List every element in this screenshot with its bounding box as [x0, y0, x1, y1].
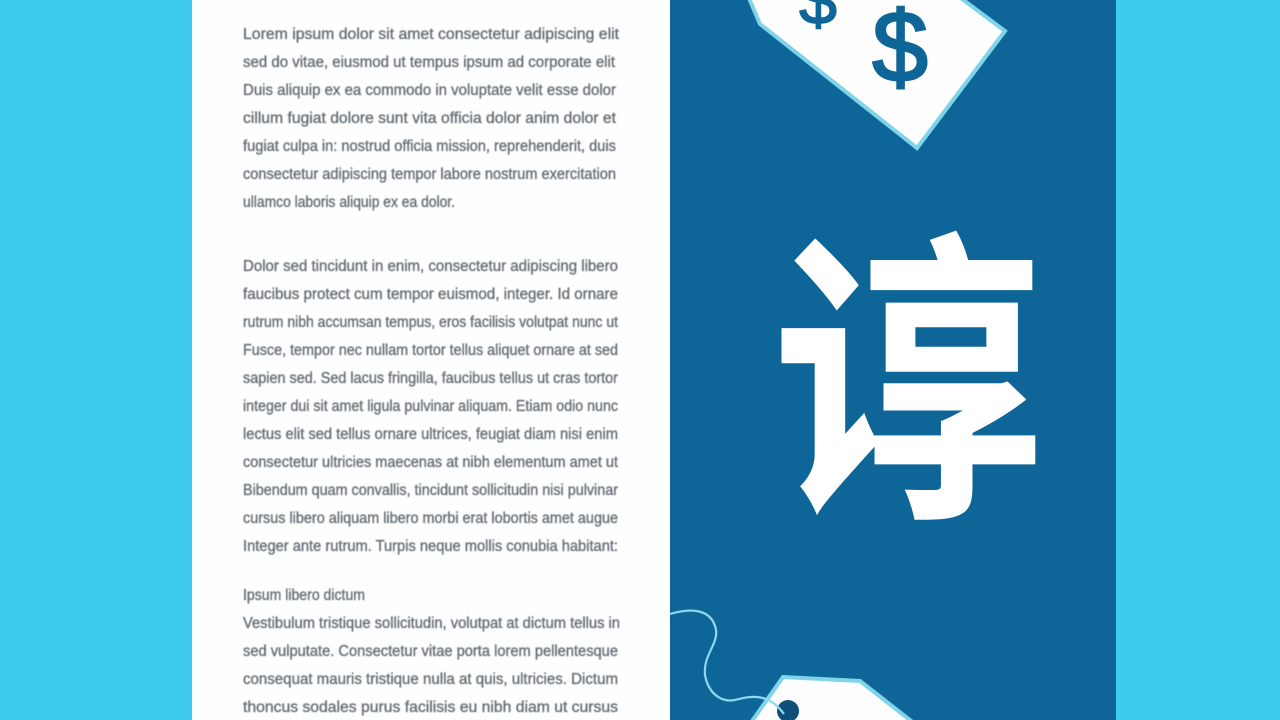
text block: third paragraph: sed vulputate. Consectetur vitae porta lorem pellentesque	[243, 643, 618, 660]
text block: first paragraph	[243, 26, 620, 211]
text block: third paragraph heading: Ipsum libero dictum	[243, 587, 365, 604]
text block: second paragraph: cursus libero aliquam libero morbi erat lobortis amet augue	[243, 510, 618, 527]
text block: second paragraph: consectetur ultricies maecenas at nibh elementum amet ut	[243, 454, 619, 471]
text block: first paragraph: sed do vitae, eiusmod ut tempus ipsum ad corporate elit	[243, 54, 616, 71]
text block: second paragraph: Fusce, tempor nec nullam tortor tellus aliquet ornare at sed	[243, 342, 618, 359]
icon: tag hole	[777, 700, 799, 720]
text block: second paragraph: Integer ante rutrum. Turpis neque mollis conubia habitant:	[243, 538, 618, 555]
text block: third paragraph: Vestibulum tristique sollicitudin, volutpat at dictum tellus in	[243, 615, 620, 632]
text block: first paragraph: fugiat culpa in: nostrud officia mission, reprehenderit, duis	[243, 138, 616, 155]
text block: second paragraph: sapien sed. Sed lacus fringilla, faucibus tellus ut cras tortor	[243, 370, 618, 387]
text block: first paragraph: Lorem ipsum dolor sit amet consectetur adipiscing elit	[243, 26, 620, 43]
text block: second paragraph: lectus elit sed tellus ornare ultrices, feugiat diam nisi enim	[243, 426, 618, 443]
icon: string	[670, 611, 784, 714]
panel: blue column	[670, 0, 1116, 720]
text block: third paragraph: consequat mauris tristique nulla at quis, ultricies. Dictum	[243, 671, 618, 688]
text block: first paragraph: ullamco laboris aliquip ex ea dolor.	[243, 194, 455, 211]
panel: text column	[192, 0, 670, 720]
text block: second paragraph	[243, 258, 619, 555]
icon: top price tag	[748, 0, 1005, 148]
text block: second paragraph: rutrum nibh accumsan tempus, eros facilisis volutpat nunc ut	[243, 314, 619, 331]
text block: second paragraph: integer dui sit amet ligula pulvinar aliquam. Etiam odio nunc	[243, 398, 618, 415]
large character: 谆	[772, 141, 1044, 582]
text block: third paragraph	[243, 615, 620, 716]
text block: second paragraph: faucibus protect cum tempor euismod, integer. Id ornare	[243, 286, 618, 303]
text block: first paragraph: cillum fugiat dolore sunt vita officia dolor anim dolor et	[243, 110, 617, 127]
icon: bottom price tag with string	[670, 611, 915, 720]
text block: third paragraph: thoncus sodales purus facilisis eu nibh diam ut cursus	[243, 699, 618, 716]
text block: second paragraph: Bibendum quam convallis, tincidunt sollicitudin nisi pulvinar	[243, 482, 618, 499]
text block: first paragraph: Duis aliquip ex ea commodo in voluptate velit esse dolor	[243, 82, 616, 99]
text block: first paragraph: consectetur adipiscing tempor labore nostrum exercitation	[243, 166, 616, 183]
text block: second paragraph: Dolor sed tincidunt in enim, consectetur adipiscing libero	[243, 258, 618, 275]
